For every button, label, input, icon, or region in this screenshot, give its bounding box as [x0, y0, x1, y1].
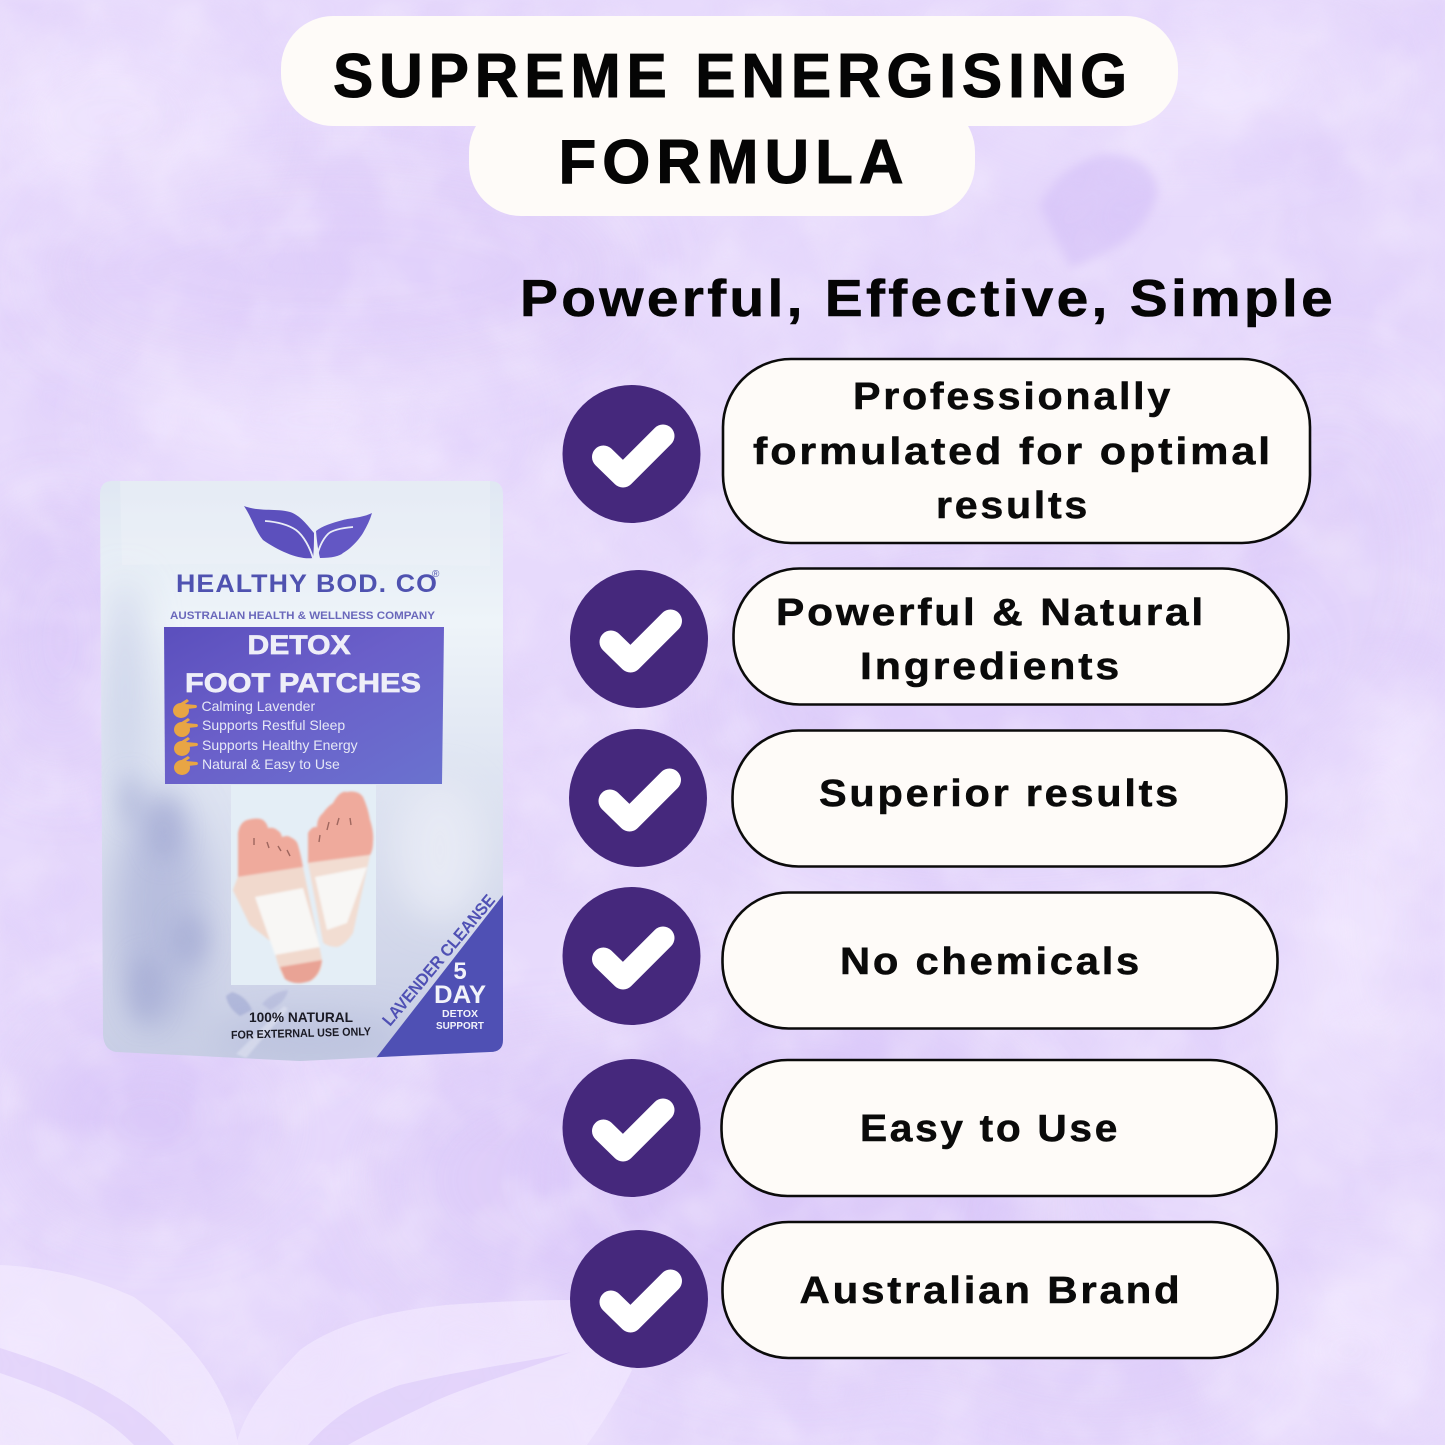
benefit row 4: [562, 887, 1278, 1028]
text: ingredients: Powerful & Natural: [776, 592, 1206, 634]
benefit row 1: [562, 359, 1310, 543]
text: ingredients: Ingredients: [860, 646, 1122, 688]
panel heading: foot patches: FOOT PATCHES: [185, 668, 421, 698]
text: professionally formulated: results: [936, 485, 1090, 527]
text: 5 day badge: DAY: [434, 981, 486, 1009]
company strapline: AUSTRALIAN HEALTH & WELLNESS COMPANY: [170, 610, 436, 622]
text: 5 day badge: 5: [453, 958, 467, 985]
panel benefits list: Natural & Easy to Use: [202, 756, 340, 772]
icon: check 3: [569, 729, 707, 867]
pill: no chemicals: [722, 892, 1278, 1028]
decorative leaf shapes: [0, 1265, 632, 1445]
blue product panel: [164, 627, 444, 784]
icon: check 5: [562, 1059, 700, 1197]
title pill: second line: [469, 100, 975, 216]
pill: professionally formulated: [723, 359, 1310, 543]
panel benefits list: [202, 698, 358, 772]
pill: easy to use: [722, 1060, 1276, 1196]
icon: check 1: [562, 385, 700, 523]
benefit row 2: [570, 568, 1288, 708]
text: lavender cleanse: LAVENDER CLEANSE: [379, 891, 499, 1030]
text: 100% natural: 100% NATURAL: [249, 1009, 353, 1025]
pill: ingredients: [734, 568, 1288, 704]
title line 2: FORMULA: [558, 128, 910, 197]
registered mark: ®: [432, 569, 440, 580]
icon: pointing hands: [173, 699, 198, 775]
corner banner: [376, 895, 503, 1058]
title: [281, 16, 1178, 216]
pill: superior results: [732, 730, 1286, 866]
benefit row 6: [570, 1222, 1278, 1368]
text: external use: FOR EXTERNAL USE ONLY: [231, 1026, 371, 1042]
foot patch photo: [231, 785, 376, 985]
text: no chemicals: No chemicals: [840, 941, 1142, 983]
brand name: HEALTHY BOD. CO: [176, 570, 438, 598]
text: superior results: Superior results: [819, 773, 1181, 815]
text: professionally formulated: formulated for optimal: [753, 431, 1273, 473]
text: easy to use: Easy to Use: [860, 1108, 1120, 1150]
panel benefits list: Calming Lavender: [202, 698, 315, 714]
subtitle: Powerful, Effective, Simple: [520, 270, 1336, 328]
title line 1: SUPREME ENERGISING: [333, 42, 1133, 111]
benefit row 3: [569, 729, 1286, 867]
text: ingredients: [776, 592, 1206, 688]
text: professionally formulated: [753, 376, 1273, 527]
title pill: first line: [281, 16, 1178, 126]
text: professionally formulated: Professionally: [853, 376, 1173, 418]
pill: australian brand: [722, 1222, 1278, 1358]
panel benefits list: Supports Healthy Energy: [202, 737, 358, 753]
benefit row 5: [562, 1059, 1276, 1197]
panel benefits list: Supports Restful Sleep: [202, 717, 345, 733]
text: 5 day badge: SUPPORT: [436, 1021, 484, 1032]
icon: check 4: [562, 887, 700, 1025]
product pouch: [95, 475, 510, 1065]
text: 5 day badge: [434, 958, 486, 1032]
icon: check 6: [570, 1230, 708, 1368]
text: 5 day badge: DETOX: [442, 1009, 478, 1020]
icon: check 2: [570, 570, 708, 708]
panel heading: detox: DETOX: [248, 630, 350, 660]
text: australian brand: Australian Brand: [800, 1270, 1182, 1312]
logo leaves: [244, 506, 372, 558]
